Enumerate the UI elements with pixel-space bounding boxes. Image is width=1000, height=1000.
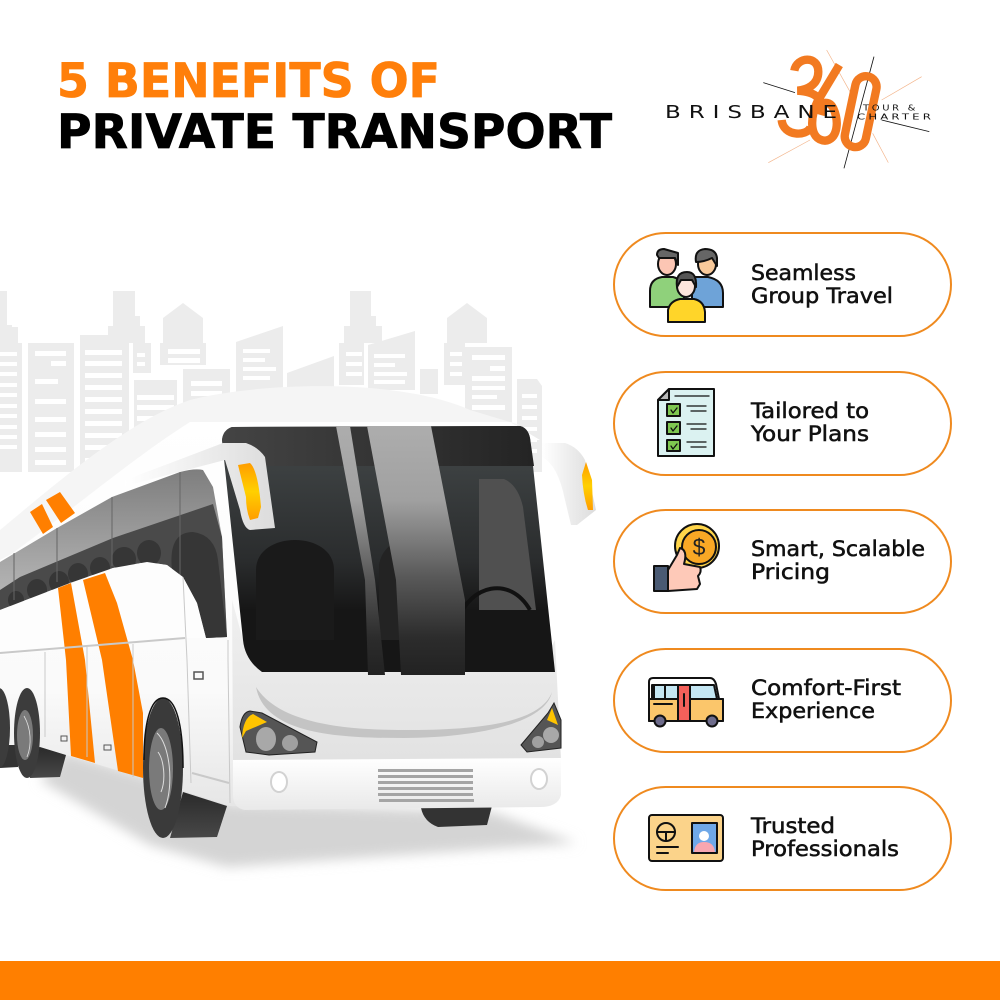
icon: thumbs up with coin — [654, 524, 719, 591]
front side wheel — [143, 698, 227, 838]
text: Comfort-First Experience: Comfort-First — [751, 676, 901, 700]
white body curve in front of window seats — [0, 562, 206, 655]
text: Comfort-First Experience — [751, 676, 901, 723]
text: Trusted Professionals — [750, 814, 899, 861]
orange stripes — [30, 492, 143, 778]
text: Tailored to Your Plans: Tailored to — [750, 399, 869, 423]
benefit pill: Comfort-First Experience — [614, 649, 951, 752]
logo: Brisbane 360 Tour & Charter: BRISBANE — [665, 103, 845, 123]
right mirror — [542, 443, 596, 525]
front smile trim — [256, 687, 552, 738]
left headlight — [240, 711, 317, 755]
text: Seamless Group Travel — [751, 261, 893, 308]
body lines and details — [0, 577, 230, 803]
icon: group of people — [650, 249, 723, 322]
ground shadow — [40, 752, 577, 867]
icon: driver licence — [649, 815, 723, 861]
icon: bus — [649, 678, 723, 726]
text: Smart, Scalable Pricing: Pricing — [751, 560, 830, 584]
icon: thumbs up with coin: $ — [693, 534, 706, 560]
title — [57, 54, 612, 160]
bumper — [233, 758, 561, 810]
text: Seamless Group Travel: Seamless — [751, 261, 856, 285]
right headlight — [521, 703, 561, 752]
roof glow — [0, 386, 520, 560]
fog lights — [271, 769, 547, 792]
logo: Brisbane 360 Tour & Charter: TOUR & — [862, 104, 918, 112]
title: PRIVATE TRANSPORT — [57, 105, 612, 160]
front panel — [232, 600, 561, 760]
benefit pill: Tailored to Your Plans — [614, 372, 951, 475]
footer bar — [0, 961, 1000, 1000]
side body — [0, 422, 250, 806]
benefit pill: Smart, Scalable Pricing — [614, 510, 951, 613]
city skyline background — [0, 291, 542, 472]
grille — [378, 769, 474, 802]
benefit pill: Seamless Group Travel — [614, 233, 951, 336]
text: Trusted Professionals: Trusted — [750, 814, 835, 838]
text: Trusted Professionals: Professionals — [751, 837, 899, 861]
side windows — [0, 469, 227, 638]
icon: checklist — [658, 389, 714, 456]
front right wheel under bumper — [421, 806, 492, 827]
text: Smart, Scalable Pricing: Smart, Scalable — [751, 537, 925, 561]
rear wheels — [0, 688, 66, 778]
bus illustration — [0, 386, 596, 867]
left mirror — [125, 443, 275, 530]
title: 5 BENEFITS OF — [57, 54, 440, 109]
text: Tailored to Your Plans — [750, 399, 869, 446]
windshield — [222, 426, 555, 675]
logo: Brisbane 360 Tour & Charter — [665, 50, 934, 168]
benefit pill: Trusted Professionals — [614, 787, 951, 890]
text: Tailored to Your Plans: Your Plans — [750, 422, 869, 446]
text: Comfort-First Experience: Experience — [751, 699, 875, 723]
text: Seamless Group Travel: Group Travel — [751, 284, 893, 308]
logo: Brisbane 360 Tour & Charter: CHARTER — [857, 112, 934, 122]
text: Smart, Scalable Pricing — [751, 537, 925, 584]
